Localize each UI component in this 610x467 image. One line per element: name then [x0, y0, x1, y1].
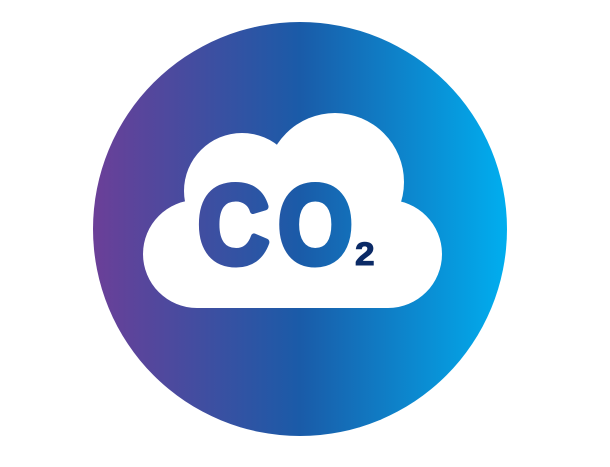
icon: white cloud	[143, 113, 442, 308]
label: CO: C	[198, 164, 269, 287]
label: subscript 2: 2	[355, 236, 375, 272]
label: CO: O	[278, 164, 352, 287]
gradient circle background	[93, 22, 507, 436]
label: CO	[198, 164, 352, 287]
